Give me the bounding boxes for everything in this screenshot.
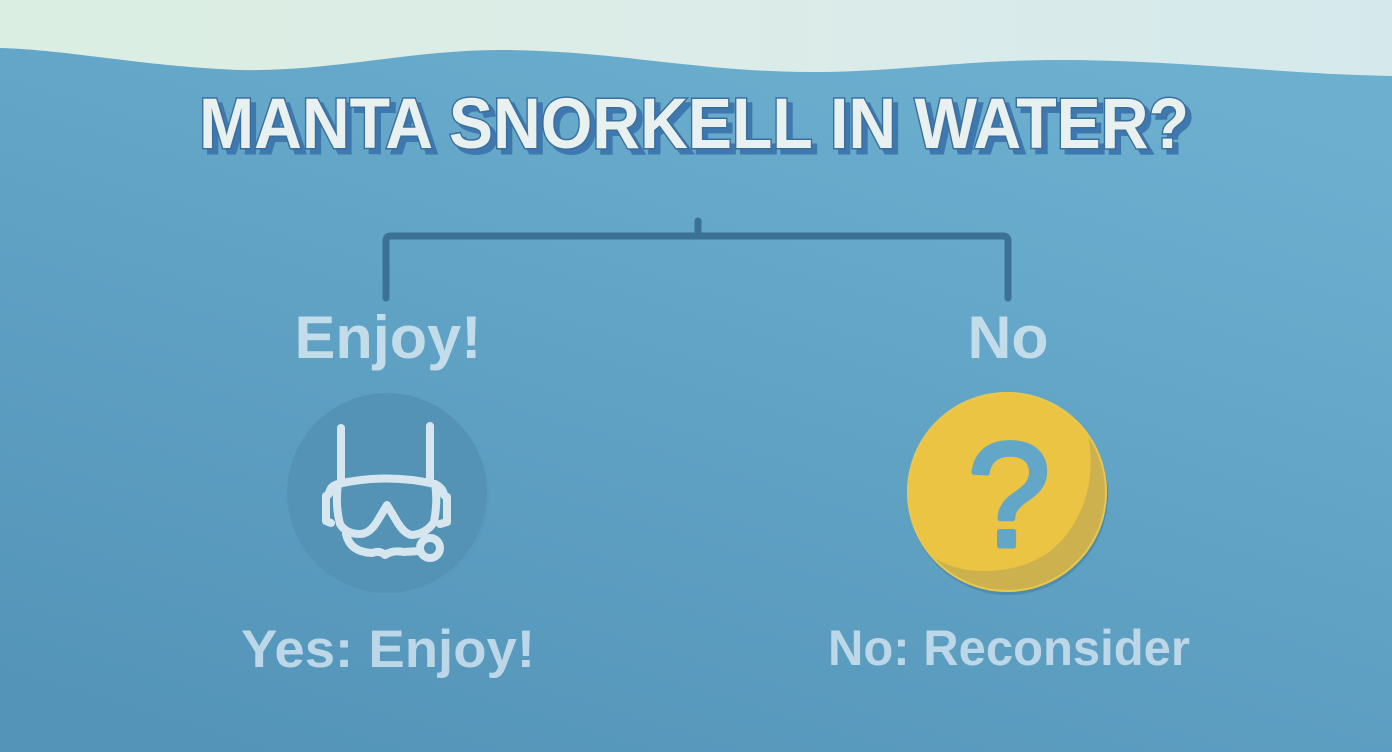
- decision bracket connector: [386, 221, 1008, 298]
- sky band: [0, 0, 1392, 90]
- label: Enjoy!: Enjoy!: [294, 304, 482, 371]
- icon: question mark: ?: [968, 413, 1050, 578]
- icon: snorkel mask: [287, 393, 489, 597]
- caption: No: Reconsider: No: Reconsider: [828, 620, 1190, 676]
- label: No: No: [968, 304, 1048, 371]
- title: MANTA SNORKELL IN WATER?: [199, 85, 1189, 164]
- caption: Yes: Enjoy!: Yes: Enjoy!: [241, 620, 535, 679]
- icon: question mark: [907, 392, 1108, 595]
- title: MANTA SNORKELL IN WATER?: [204, 90, 1194, 169]
